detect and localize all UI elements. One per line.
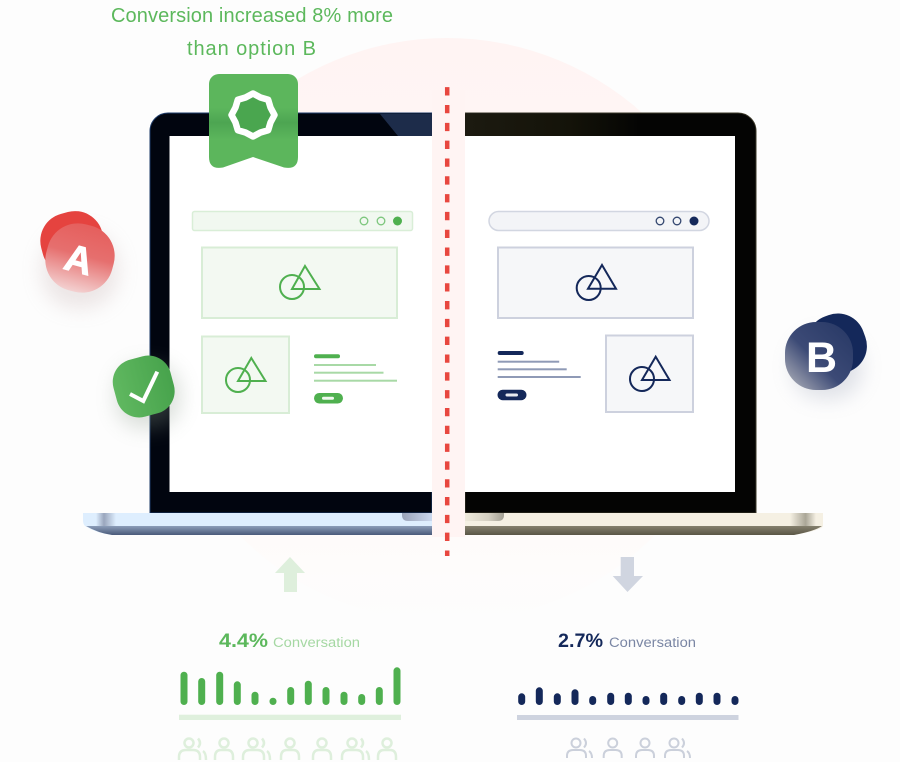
- B front blob: [785, 322, 853, 390]
- arrow up: [275, 557, 305, 592]
- bezel glare: [380, 114, 432, 136]
- A hero image box: [202, 248, 397, 318]
- A button: [314, 393, 343, 404]
- laptop left half: variant A bezel: [150, 113, 432, 513]
- ribbon badge: [209, 74, 298, 168]
- laptop base left: [83, 513, 432, 535]
- stat A: 4.4%: [219, 630, 268, 652]
- center divider strip: [432, 90, 465, 537]
- B button: [498, 390, 526, 400]
- badge B: [785, 306, 875, 399]
- laptop right half: variant B bezel: [465, 113, 756, 513]
- B small image box: [606, 336, 693, 412]
- background circle: [155, 38, 739, 622]
- headline callout: than option B: [187, 38, 316, 60]
- B browser bar: [489, 212, 709, 230]
- B hero image box: [498, 248, 693, 318]
- A small image box: [202, 336, 289, 413]
- letter A: A: [60, 237, 97, 284]
- stat B: 2.7%: [558, 630, 603, 652]
- icon: star seal: [232, 94, 274, 136]
- arrow down: [613, 557, 643, 592]
- headline callout: Conversion increased 8% more: [111, 5, 393, 27]
- headline callout: [111, 5, 393, 60]
- variant A page wireframe: [192, 212, 412, 413]
- laptop base right: [465, 513, 823, 535]
- A text lines: [314, 354, 397, 382]
- laptop: [83, 113, 823, 535]
- badge check: [108, 350, 180, 428]
- check tile: [108, 350, 180, 423]
- red dashed divider: [445, 87, 449, 556]
- A back blob: [34, 205, 111, 281]
- bar chart A: [179, 667, 401, 720]
- B text lines: [498, 351, 581, 378]
- A browser bar: [192, 212, 412, 230]
- people icons B: [567, 738, 690, 758]
- laptop screen: [170, 136, 735, 492]
- letter B: B: [806, 334, 837, 382]
- stat B: [558, 630, 696, 652]
- icon: check mark: [130, 372, 157, 401]
- stat B: Conversation: [609, 635, 696, 650]
- people icons A: [179, 738, 396, 760]
- A front blob: [38, 216, 122, 300]
- stat A: Conversation: [273, 635, 360, 650]
- B back blob: [799, 306, 875, 382]
- bar chart B: [517, 687, 738, 720]
- badge A: [34, 205, 122, 308]
- variant B page wireframe: [489, 212, 709, 412]
- stat A: [219, 630, 360, 652]
